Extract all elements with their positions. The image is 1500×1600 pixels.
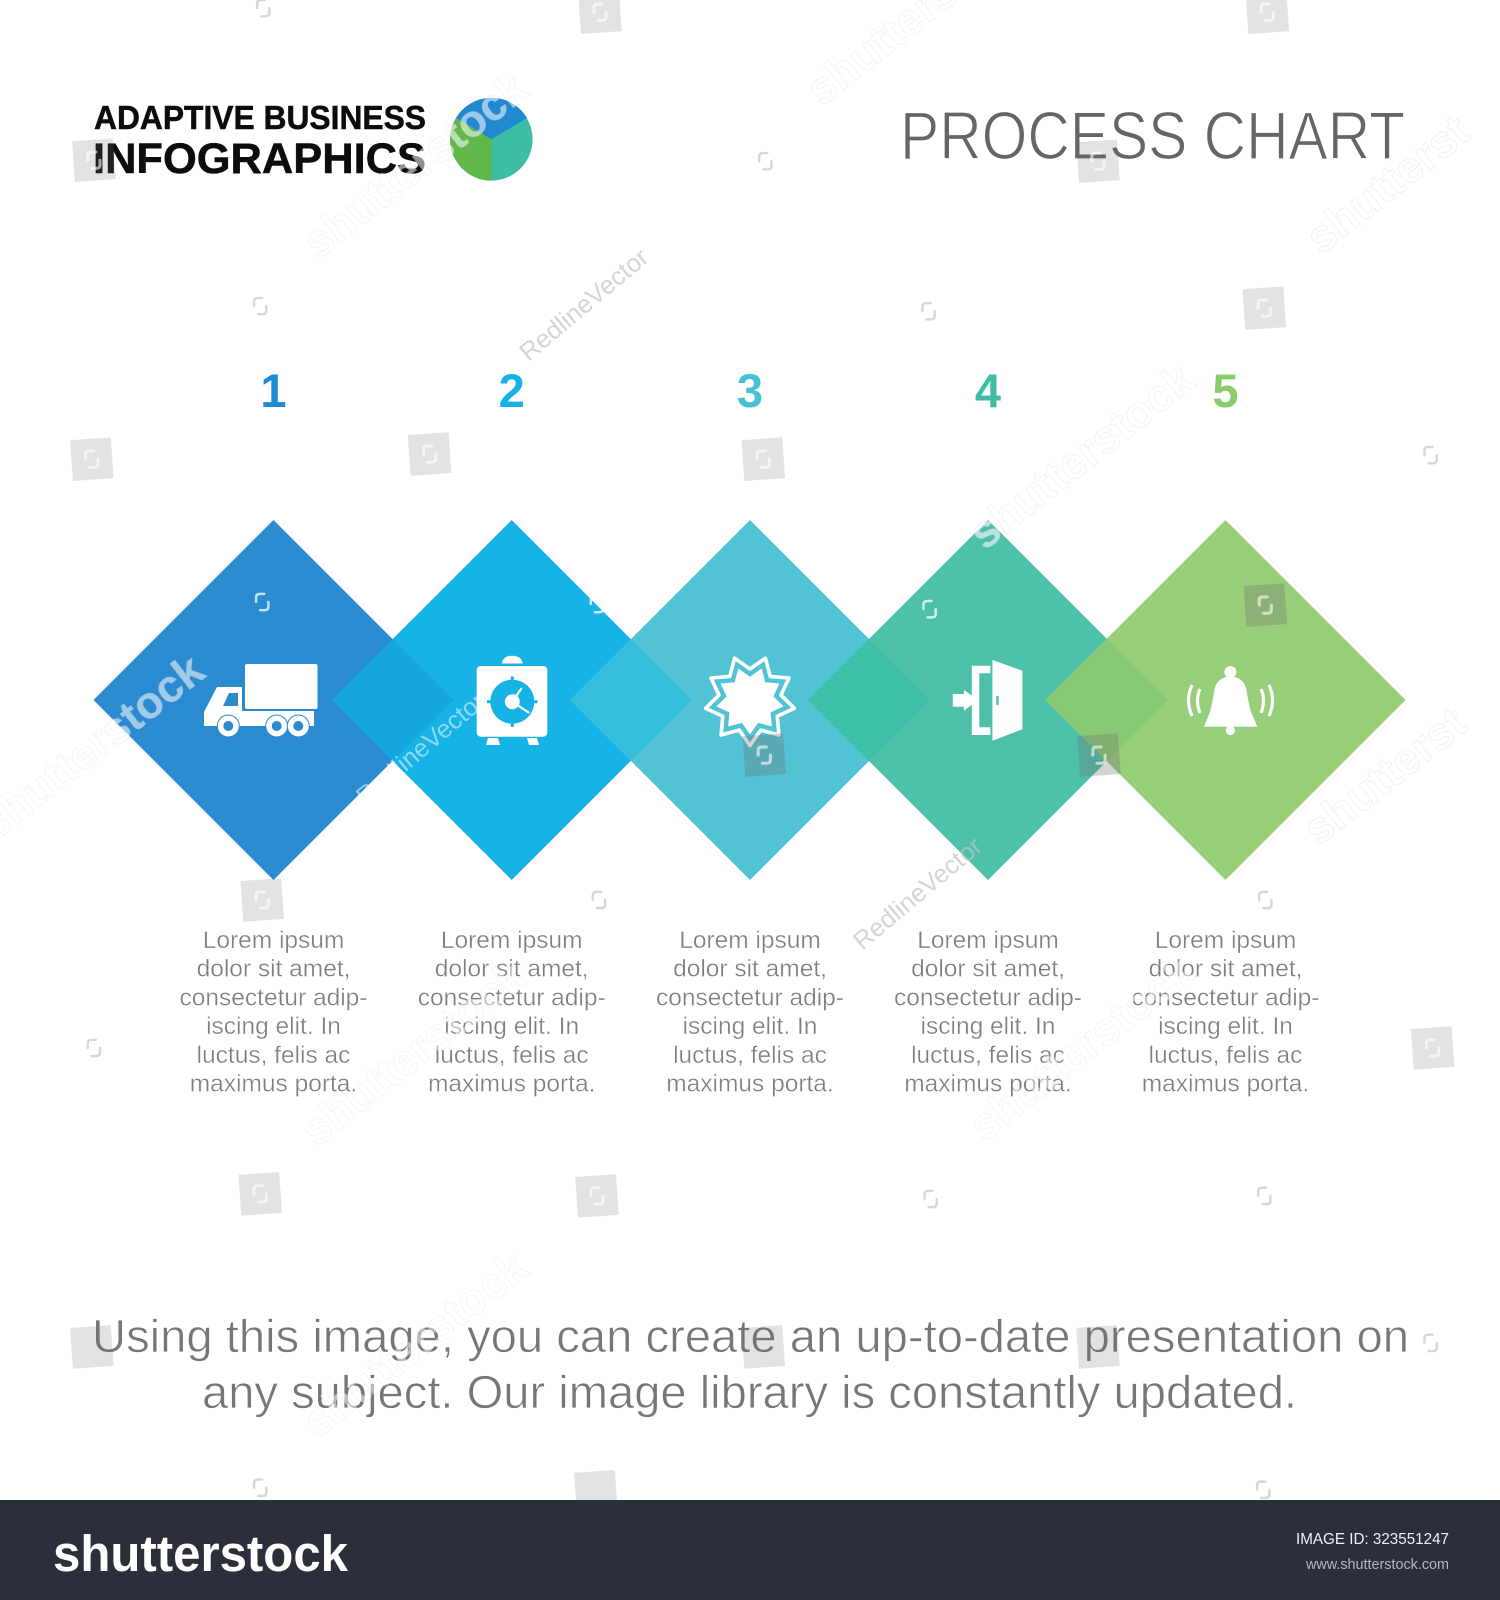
image id: IMAGE ID: 323551247 — [1296, 1531, 1449, 1548]
text block: step 2: consectetur adip- — [418, 984, 606, 1011]
watermark text: shutterst — [1293, 696, 1476, 855]
watermark text: shutterst — [1296, 105, 1479, 263]
text block: step 4: iscing elit. In — [921, 1013, 1055, 1040]
text block: step 4: Lorem ipsum — [917, 927, 1059, 954]
step numbers: 1 — [260, 364, 287, 417]
step numbers: 3 — [737, 364, 763, 417]
logo heading: INFOGRAPHICS — [93, 135, 426, 183]
text block: step 4: maximus porta. — [904, 1070, 1072, 1098]
closing statement: Using this image, you can create an up-to-date presentation on — [92, 1310, 1409, 1362]
text block: step 5: consectetur adip- — [1132, 984, 1319, 1011]
text block: step 3: consectetur adip- — [656, 984, 844, 1011]
text block: step 2: maximus porta. — [428, 1070, 595, 1098]
diamond chain — [94, 520, 1406, 880]
watermark text: shutterstock — [293, 1241, 537, 1447]
footer brand: shutterstock — [53, 1525, 349, 1582]
text block: step 3: Lorem ipsum — [679, 927, 821, 954]
text block: step 4: luctus, felis ac — [911, 1042, 1065, 1069]
closing statement: any subject. Our image library is constantly updated. — [202, 1366, 1297, 1418]
icon: clock safe — [477, 656, 547, 745]
text block: step 5: maximus porta. — [1142, 1070, 1309, 1098]
text block: step 2: Lorem ipsum — [441, 927, 583, 954]
closing statement — [92, 1310, 1409, 1418]
text block: step 3: iscing elit. In — [683, 1013, 817, 1040]
icon: door with arrow — [953, 660, 1022, 741]
watermark text: RedlineVector — [848, 832, 988, 956]
text block: step 1: maximus porta. — [190, 1070, 357, 1098]
text block: step 2: luctus, felis ac — [435, 1042, 589, 1069]
title: PROCESS CHART — [900, 98, 1405, 174]
text block: step 3: dolor sit amet, — [673, 956, 827, 983]
watermark text: shutterstock — [293, 62, 537, 268]
step numbers — [260, 364, 1239, 417]
step numbers: 4 — [975, 364, 1001, 417]
text block: step 1: Lorem ipsum — [203, 927, 344, 954]
icon: truck — [204, 664, 318, 737]
step descriptions — [180, 927, 1319, 1098]
watermark swirl marks on stamps — [86, 4, 1439, 1204]
watermark text: RedlineVector — [514, 243, 654, 367]
website: www.shutterstock.com — [1305, 1556, 1449, 1573]
text block: step 2: iscing elit. In — [444, 1013, 579, 1040]
watermark text: shutterstock — [959, 353, 1203, 559]
icon: ringing bell — [1188, 666, 1272, 735]
text block: step 5: luctus, felis ac — [1149, 1042, 1302, 1069]
text block: step 1: dolor sit amet, — [197, 956, 350, 983]
logo heading: ADAPTIVE BUSINESS — [94, 99, 426, 136]
text block: step 5: Lorem ipsum — [1155, 927, 1296, 954]
icon: nine-point star — [706, 658, 794, 746]
text block: step 5: dolor sit amet, — [1149, 956, 1302, 983]
text block: step 5: iscing elit. In — [1158, 1013, 1293, 1040]
text block: step 1: luctus, felis ac — [197, 1042, 350, 1069]
text block: step 1: iscing elit. In — [206, 1013, 341, 1040]
footer bar — [0, 1500, 1500, 1600]
text block: step 1: consectetur adip- — [180, 984, 367, 1011]
text block: step 4: consectetur adip- — [894, 984, 1082, 1011]
logo heading — [93, 99, 426, 183]
icon: logo pie — [450, 98, 533, 181]
text block: step 2: dolor sit amet, — [435, 956, 589, 983]
text block: step 3: maximus porta. — [666, 1070, 834, 1098]
step numbers: 2 — [499, 364, 525, 417]
watermark text: shutterstock — [291, 950, 535, 1156]
watermark text: RedlineVector — [351, 687, 491, 811]
text block: step 4: dolor sit amet, — [911, 956, 1065, 983]
text block: step 3: luctus, felis ac — [673, 1042, 827, 1069]
watermark text: shutterstock — [959, 945, 1203, 1151]
step numbers: 5 — [1212, 364, 1239, 417]
